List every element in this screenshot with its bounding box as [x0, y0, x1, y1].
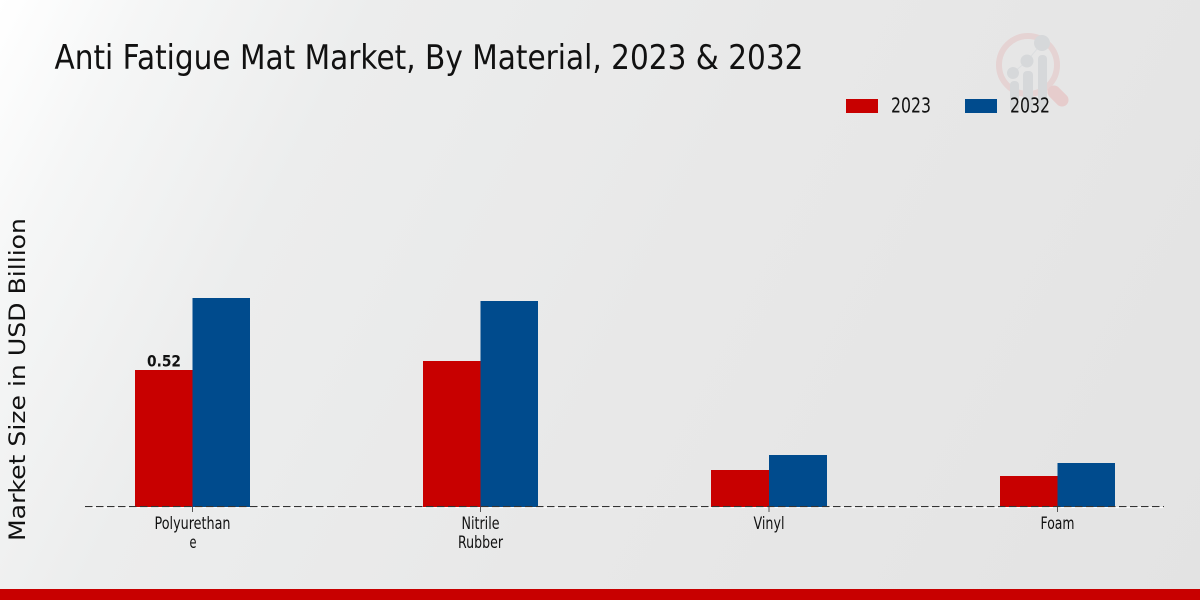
category label: Polyurethane: Polyurethan [154, 514, 230, 533]
title: Anti Fatigue Mat Market, By Material, 2023 & 2032 [54, 38, 804, 78]
category label: Nitrile Rubber [458, 514, 503, 552]
legend label 2023: 2023 [891, 94, 931, 118]
category label: Polyurethane [154, 514, 230, 552]
watermark logo [999, 35, 1062, 111]
category label: Nitrile Rubber: Rubber [458, 533, 503, 552]
y axis label: Market Size in USD Billion [6, 218, 31, 541]
category label: Foam: Foam [1040, 514, 1074, 533]
bar chart [85, 298, 1164, 512]
bars: Vinyl [711, 455, 827, 507]
bars: Nitrile Rubber [423, 301, 538, 507]
legend swatch 2023 [846, 99, 878, 113]
category label: Nitrile Rubber: Nitrile [462, 514, 500, 533]
legend [846, 94, 1050, 118]
value label 0.52: 0.52 [147, 352, 181, 370]
bottom red bar [0, 589, 1200, 600]
category label: Polyurethane: e [190, 533, 196, 552]
bars: Polyurethane [135, 298, 250, 507]
legend label 2032: 2032 [1010, 94, 1050, 118]
bars: Foam [1000, 463, 1115, 507]
category label: Vinyl: Vinyl [754, 514, 784, 533]
legend swatch 2032 [965, 99, 997, 113]
